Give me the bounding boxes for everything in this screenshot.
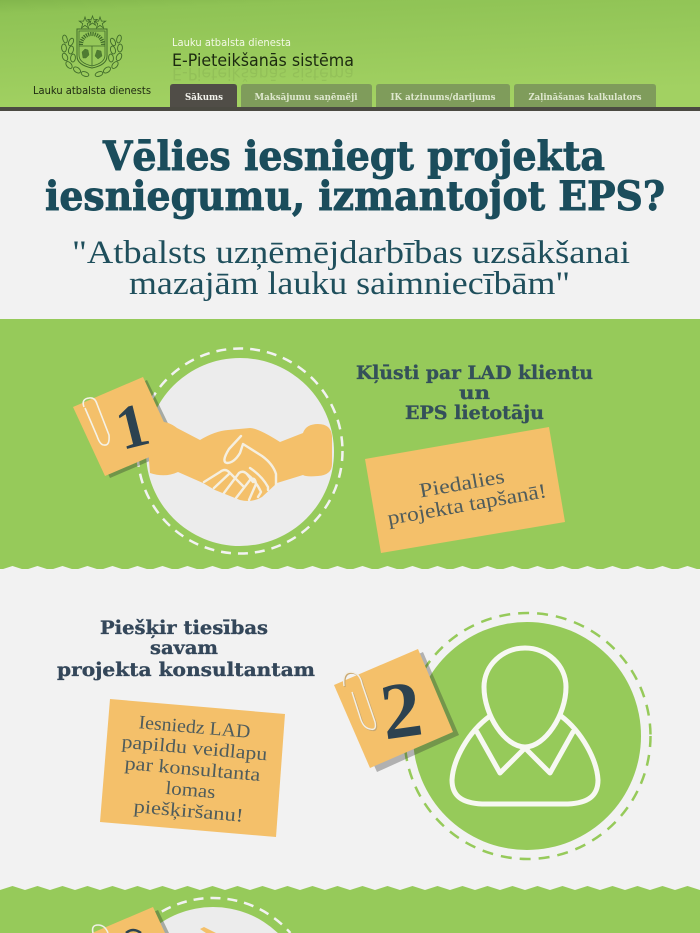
numeral — [126, 930, 141, 933]
system supertitle: Lauku atbalsta dienesta — [172, 37, 291, 49]
step 1 heading: un — [459, 382, 490, 404]
note paper — [92, 907, 165, 933]
green disc — [413, 622, 641, 850]
navigation tabs — [170, 84, 656, 107]
note shadow — [108, 910, 169, 933]
step 2 background — [0, 569, 700, 890]
callout: additional form: Iesniedz LAD — [138, 712, 251, 743]
icon: paperclip — [93, 925, 108, 933]
callout: additional form — [100, 699, 285, 837]
tab: IK atzinums/darijums: IK atzinums/darijums — [390, 92, 496, 103]
subtitle — [72, 235, 630, 302]
header background — [0, 0, 700, 107]
system title: E-Pieteikšanās sistēma — [172, 51, 354, 70]
callout: additional form: piešķiršanu! — [133, 796, 244, 827]
circle with handshake — [78, 348, 342, 554]
note: number 2 — [334, 649, 453, 768]
note paper — [334, 649, 453, 768]
header bottom bar — [0, 107, 700, 111]
numeral: 1 — [109, 390, 156, 464]
step 2 heading: savam — [150, 637, 218, 659]
note paper — [73, 377, 175, 476]
callout: additional form: papildu veidlapu — [121, 732, 269, 765]
circle with person — [340, 613, 650, 859]
panel: step 2 — [0, 569, 700, 890]
tab: IK atzinums/darijums — [376, 84, 510, 107]
light disc — [146, 358, 334, 546]
icon: hand fragment — [200, 927, 216, 933]
step 1 heading — [356, 362, 593, 424]
step 2 heading: projekta konsultantam — [57, 659, 315, 681]
step 3 background — [0, 890, 700, 933]
tab: Maksājumu saņēmēji — [241, 84, 372, 107]
dashed ring — [136, 898, 290, 933]
tab: Zaļināšanas kalkulators — [514, 84, 656, 107]
title block — [45, 133, 665, 302]
wavy edge — [0, 565, 700, 571]
step 1 heading: EPS lietotāju — [405, 402, 544, 424]
subtitle: "Atbalsts uzņēmējdarbības uzsākšanai — [72, 235, 630, 271]
light disc — [148, 907, 278, 933]
panel: step 1 — [0, 319, 700, 571]
main title: Vēlies iesniegt projekta — [102, 133, 605, 180]
step 1 heading: Kļūsti par LAD klientu — [356, 362, 593, 384]
callout: additional form: par konsultanta — [124, 753, 262, 786]
wavy edge — [0, 885, 700, 891]
icon: person — [452, 648, 598, 804]
organisation name: Lauku atbalsta dienests — [33, 84, 151, 97]
note: number 1 — [73, 377, 175, 476]
callout: join the project: Piedalies — [418, 466, 506, 502]
main title: iesniegumu, izmantojot EPS? — [45, 173, 665, 220]
site header — [0, 0, 700, 111]
tab: Sākums — [170, 84, 237, 107]
tab: Maksājumu saņēmēji: Maksājumu saņēmēji — [254, 92, 358, 103]
step 1 background — [0, 319, 700, 570]
step 2 heading — [57, 617, 315, 681]
tab: Zaļināšanas kalkulators: Zaļināšanas kalkulators — [528, 92, 642, 103]
note: number 3 — [92, 907, 165, 933]
subtitle: mazajām lauku saimniecībām" — [129, 266, 570, 302]
note shadow — [78, 380, 180, 478]
main title — [45, 133, 665, 220]
callout: join the project — [365, 427, 565, 553]
note shadow — [340, 652, 459, 772]
callout: additional form: lomas — [165, 778, 216, 803]
icon: paperclip — [344, 672, 376, 730]
system title reflection: E-Pieteikšanās sistēma — [172, 64, 354, 83]
callout: join the project: projekta tapšanā! — [386, 480, 548, 530]
logo: coat of arms — [61, 16, 123, 77]
circle — [108, 898, 290, 933]
panel: step 3 — [0, 885, 700, 933]
icon: handshake — [146, 421, 332, 501]
numeral: 2 — [375, 665, 427, 757]
tab: Sākums: Sākums — [185, 92, 223, 103]
step 2 heading: Piešķir tiesības — [100, 617, 268, 639]
icon: paperclip — [83, 398, 109, 445]
dashed ring — [138, 348, 342, 554]
dashed ring — [404, 613, 650, 859]
